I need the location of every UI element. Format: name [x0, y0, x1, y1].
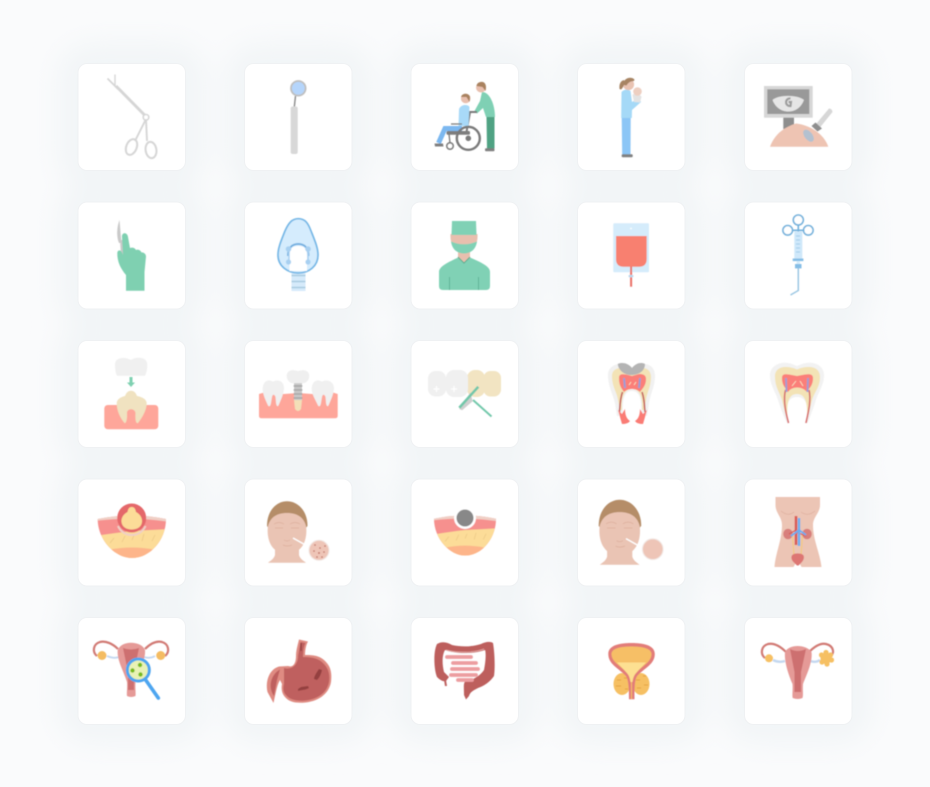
- icon set infographic: [78, 63, 852, 725]
- icon: face with clear skin: [599, 500, 666, 565]
- icon: surgical forceps: [108, 74, 157, 159]
- icon: tooth cross-section: [770, 363, 824, 424]
- icon: tooth with filling: [608, 363, 655, 424]
- icon: skin cyst: [97, 502, 166, 559]
- icon: skin blackhead: [434, 509, 496, 556]
- icon: gloved hand with scalpel: [117, 220, 146, 291]
- icon: torso with urinary system: [774, 497, 822, 567]
- icon: uterus under magnifier: [94, 642, 168, 698]
- icon: ultrasound scan: [764, 86, 832, 147]
- icon: syringe: [783, 215, 813, 295]
- icon: dental veneers: [428, 370, 501, 416]
- icon: uterus and ovaries: [762, 644, 834, 699]
- icon: face with acne: [267, 501, 332, 563]
- icon: blood bag: [613, 223, 649, 287]
- icon: dental crown: [104, 358, 158, 429]
- icon: surgeon: [439, 221, 490, 290]
- icon: dental implant: [259, 370, 338, 418]
- icon: intestines: [434, 642, 495, 700]
- icon: dental mirror: [291, 81, 306, 154]
- icon: oxygen mask: [278, 219, 318, 291]
- panel: white icon cards: [78, 64, 852, 724]
- icon: stomach: [267, 640, 331, 703]
- icon: nurse holding baby: [619, 78, 642, 157]
- icon: bladder and prostate: [608, 643, 655, 699]
- icon: wheelchair and carer: [434, 82, 495, 151]
